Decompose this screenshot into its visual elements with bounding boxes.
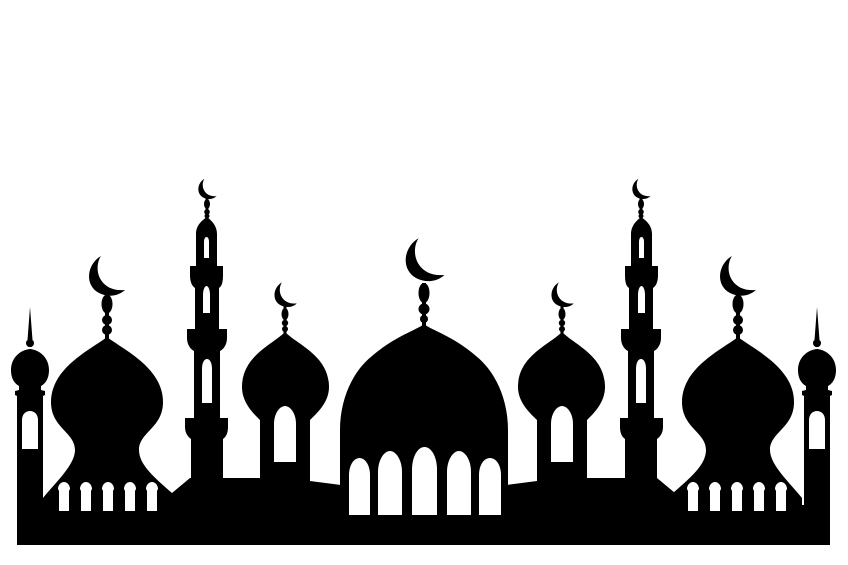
crescent: left minaret [198, 179, 217, 199]
crescent: central dome [406, 238, 445, 281]
left minaret [185, 198, 228, 545]
crescent: inner right dome [551, 282, 574, 307]
central dome [340, 283, 508, 545]
crescent: right onion dome [720, 256, 756, 296]
left corner tower [11, 307, 49, 545]
central dome windows [349, 447, 501, 515]
crescent: inner left dome [274, 282, 297, 307]
inner right dome [518, 306, 605, 545]
right corner tower [798, 307, 836, 545]
inner left dome [242, 306, 329, 545]
building base [17, 478, 830, 545]
left onion dome [43, 294, 172, 545]
right onion dome [673, 294, 802, 545]
crescent: right minaret [632, 179, 651, 199]
crescent: left onion dome [89, 256, 125, 296]
right minaret [620, 198, 663, 545]
